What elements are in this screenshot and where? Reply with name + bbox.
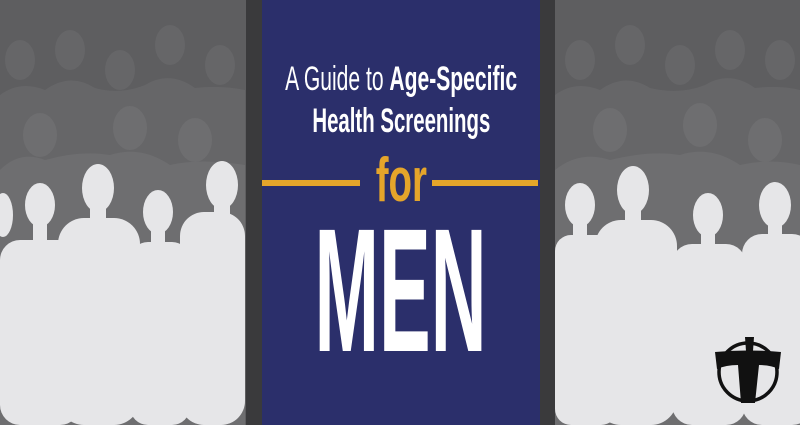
logo: cross in circle	[715, 337, 781, 403]
center navy panel	[262, 0, 540, 425]
orange rule right	[432, 180, 538, 186]
left front row	[0, 193, 13, 237]
title text	[285, 60, 517, 140]
right front row	[565, 183, 595, 227]
title text: Health Screenings	[312, 102, 490, 140]
title text: A Guide to Age-Specific	[285, 60, 517, 98]
MEN: MEN	[315, 193, 487, 389]
for: for	[375, 146, 427, 215]
center dark strip	[246, 0, 555, 425]
orange rule left	[262, 180, 360, 186]
